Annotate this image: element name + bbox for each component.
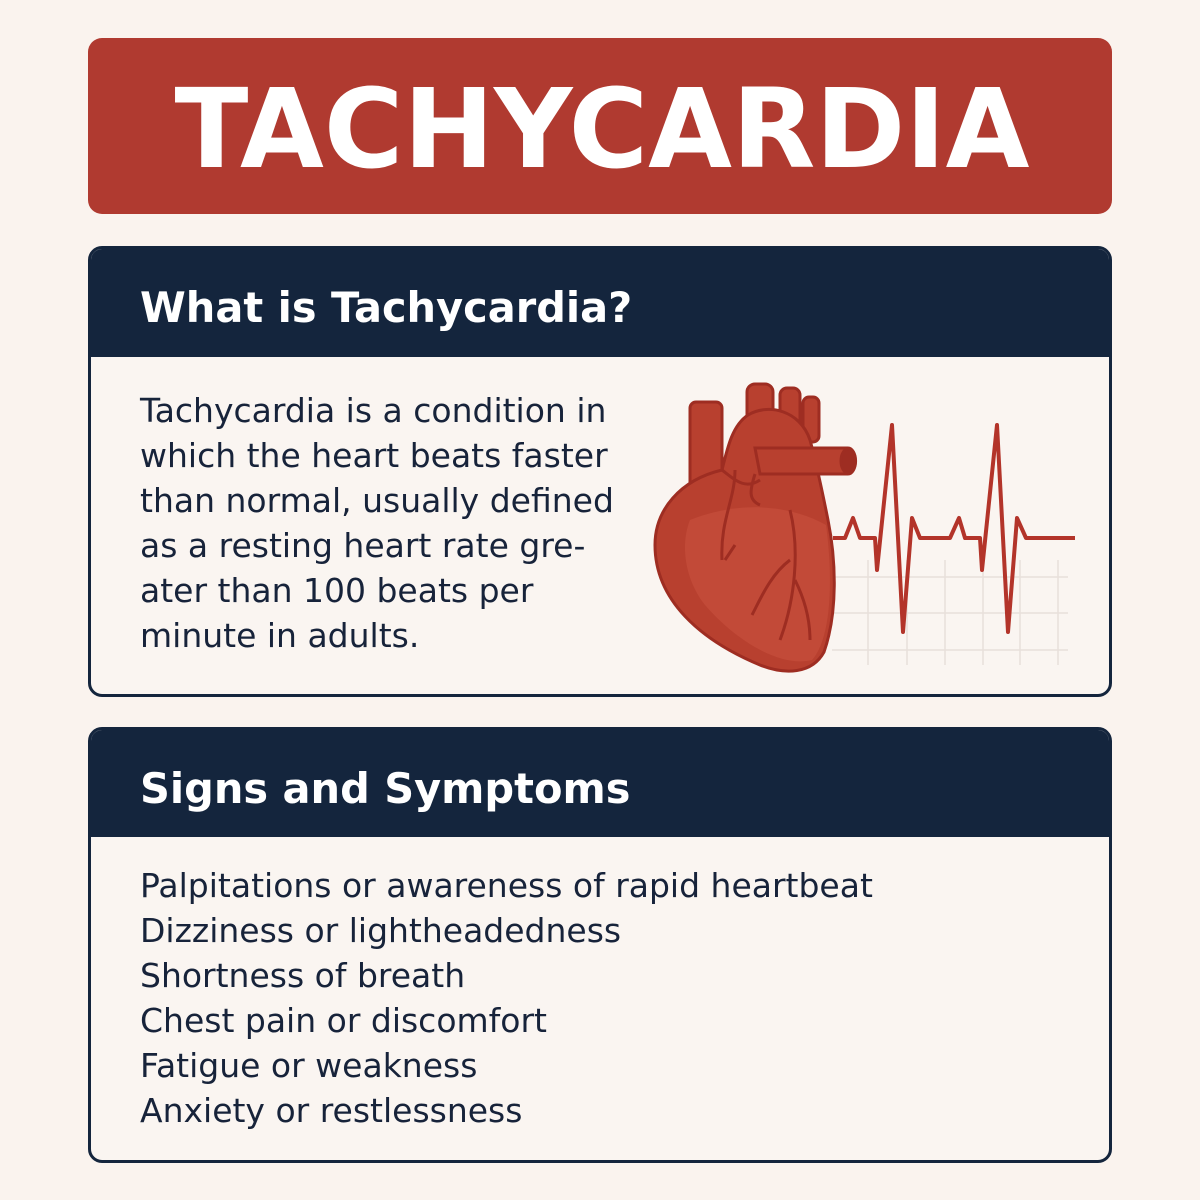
ECG line xyxy=(833,425,1075,632)
title text: TACHYCARDIA xyxy=(174,65,1030,193)
symptom list: Fatigue or weakness xyxy=(140,1046,477,1085)
title banner xyxy=(88,38,1112,214)
icon: heart xyxy=(655,384,856,671)
definition text: than normal, usually defined xyxy=(140,481,614,520)
panel: what is tachycardia xyxy=(88,246,1112,697)
heading: what is: What is Tachycardia? xyxy=(140,283,632,332)
heading: signs: Signs and Symptoms xyxy=(140,764,630,813)
definition text: as a resting heart rate gre- xyxy=(140,526,585,565)
heading: what is xyxy=(91,249,1109,357)
panel: signs and symptoms xyxy=(88,727,1112,1163)
definition text xyxy=(140,391,614,655)
symptom list xyxy=(140,866,873,1130)
heading: signs xyxy=(91,730,1109,837)
definition text: ater than 100 beats per xyxy=(140,571,533,610)
definition text: which the heart beats faster xyxy=(140,436,608,475)
symptom list: Shortness of breath xyxy=(140,956,465,995)
symptom list: Palpitations or awareness of rapid heartbeat xyxy=(140,866,873,905)
definition text: minute in adults. xyxy=(140,616,419,655)
symptom list: Chest pain or discomfort xyxy=(140,1001,547,1040)
definition text: Tachycardia is a condition in xyxy=(140,391,606,430)
symptom list: Dizziness or lightheadedness xyxy=(140,911,621,950)
symptom list: Anxiety or restlessness xyxy=(140,1091,522,1130)
